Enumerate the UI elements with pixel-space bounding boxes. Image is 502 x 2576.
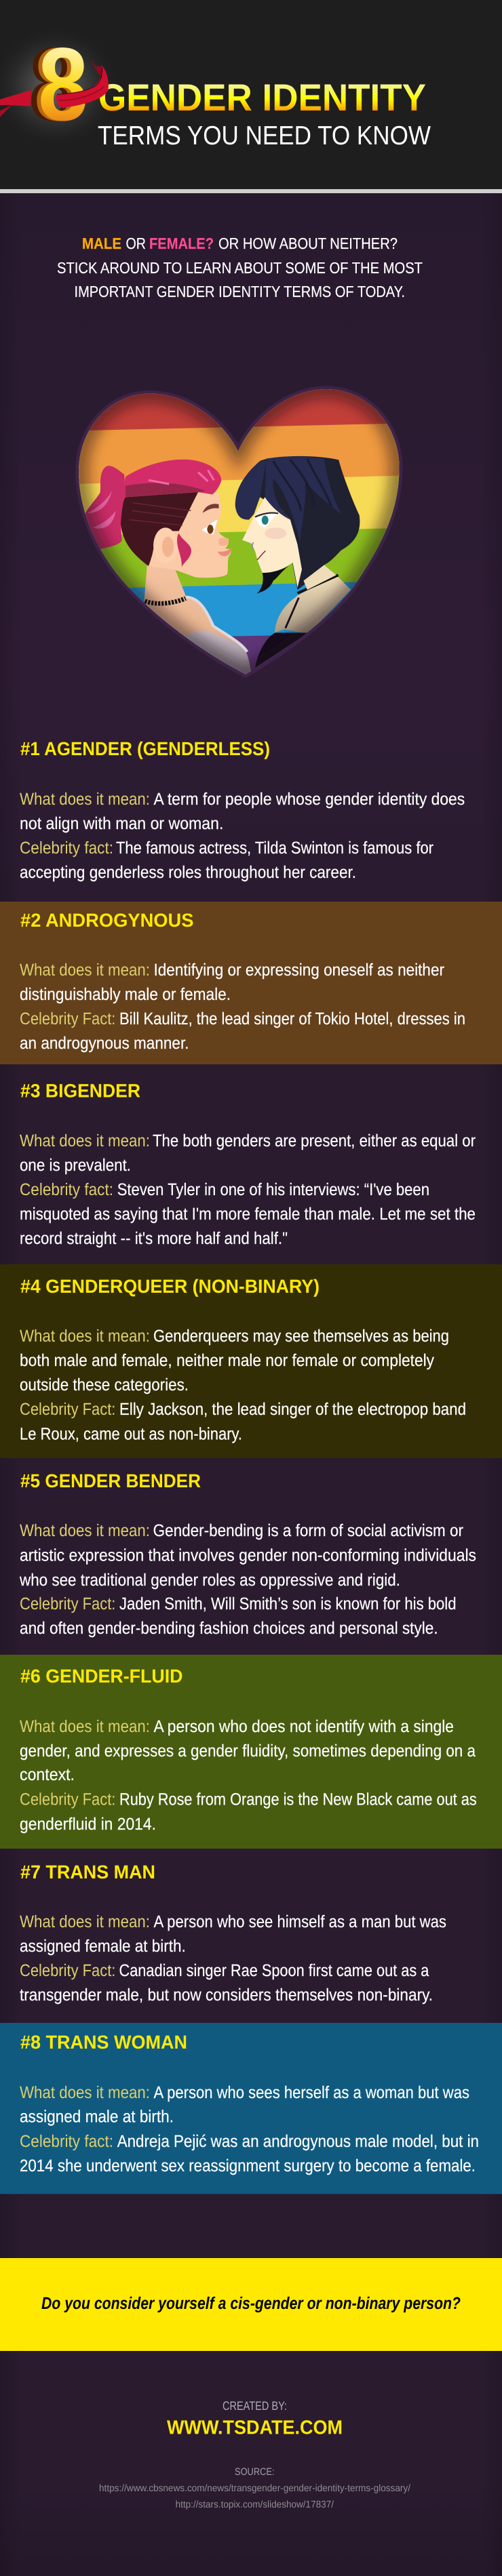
sources: http://stars.topix.com/slideshow/17837/ xyxy=(176,2499,334,2510)
icon: glow behind number xyxy=(0,24,122,149)
callout: question band xyxy=(0,2258,502,2351)
definition text: What does it mean: xyxy=(20,1912,150,1931)
sources: https://www.cbsnews.com/news/transgender-gender-identity-terms-glossary/ xyxy=(99,2483,411,2494)
panel: #2 androgynous xyxy=(0,902,502,1064)
definition text: outside these categories. xyxy=(20,1375,189,1394)
title: gender identity: GENDER IDENTITY xyxy=(98,76,426,119)
celebrity fact text xyxy=(20,839,433,882)
definition text: What does it mean: xyxy=(20,1521,150,1540)
intro text xyxy=(57,235,423,300)
celebrity fact text xyxy=(20,2132,479,2175)
definition text: not align with man or woman. xyxy=(20,814,223,833)
definition text: A person who does not identify with a single xyxy=(153,1717,454,1736)
definition text: A term for people whose gender identity does xyxy=(153,790,465,809)
celebrity fact text: Celebrity Fact: xyxy=(20,1790,115,1809)
definition text xyxy=(20,2083,469,2126)
celebrity fact text: record straight -- it's more half and half." xyxy=(20,1229,288,1248)
panel: #8 trans woman xyxy=(0,2023,502,2194)
definition text: What does it mean: xyxy=(20,790,150,809)
celebrity fact text: Steven Tyler in one of his interviews: “I've been xyxy=(117,1180,429,1199)
panel: #4 genderqueer xyxy=(0,1264,502,1458)
celebrity fact text xyxy=(20,1180,476,1248)
heading: #4: #4 GENDERQUEER (NON-BINARY) xyxy=(20,1276,320,1297)
definition text xyxy=(20,790,465,833)
icon: golden 8 with red ribbon xyxy=(0,26,109,142)
celebrity fact text: Celebrity fact: xyxy=(20,2132,113,2151)
definition text xyxy=(20,961,444,1004)
heading: #1: #1 AGENDER (GENDERLESS) xyxy=(20,738,270,759)
celebrity fact text: Celebrity Fact: xyxy=(20,1961,115,1980)
intro text: FEMALE? xyxy=(149,235,214,252)
header panel xyxy=(0,0,502,193)
panel: #1 agender xyxy=(0,719,502,902)
illustration: rainbow heart with two figures xyxy=(75,386,403,678)
heading: #6: #6 GENDER-FLUID xyxy=(20,1666,183,1687)
definition text: Genderqueers may see themselves as being xyxy=(153,1327,449,1346)
definition text: What does it mean: xyxy=(20,1717,150,1736)
celebrity fact text xyxy=(20,1594,456,1638)
heading: #7: #7 TRANS MAN xyxy=(20,1861,155,1883)
celebrity fact text: and often gender-bending fashion choices and personal style. xyxy=(20,1619,438,1638)
celebrity fact text: Canadian singer Rae Spoon first came out as a xyxy=(119,1961,429,1980)
heart inner shadow xyxy=(79,389,400,675)
created by label: CREATED BY: xyxy=(223,2399,287,2413)
celebrity fact text: transgender male, but now considers themselves non-binary. xyxy=(20,1986,433,2005)
definition text: both male and female, neither male nor female or completely xyxy=(20,1351,434,1370)
definition text xyxy=(20,1912,446,1956)
celebrity fact text: Jaden Smith, Will Smith’s son is known for his bold xyxy=(119,1594,456,1613)
celebrity fact text: Celebrity fact: xyxy=(20,839,113,858)
definition text: What does it mean: xyxy=(20,2083,150,2102)
definition text: A person who sees herself as a woman but was xyxy=(153,2083,469,2102)
definition text: Identifying or expressing oneself as neither xyxy=(153,961,444,980)
celebrity fact text: Celebrity Fact: xyxy=(20,1009,115,1028)
subtitle: terms you need to know: TERMS YOU NEED TO KNOW xyxy=(98,121,431,150)
rainbow stripes xyxy=(79,389,399,675)
panel: #3 bigender xyxy=(0,1064,502,1264)
intro text: OR HOW ABOUT NEITHER? xyxy=(218,235,398,252)
celebrity fact text: genderfluid in 2014. xyxy=(20,1815,156,1834)
celebrity fact text: Celebrity Fact: xyxy=(20,1400,115,1419)
definition text: What does it mean: xyxy=(20,1327,150,1346)
sources xyxy=(99,2466,411,2510)
definition text xyxy=(20,1131,476,1175)
heading: #2: #2 ANDROGYNOUS xyxy=(20,910,194,931)
definition text: assigned female at birth. xyxy=(20,1937,186,1956)
intro text: MALE xyxy=(82,235,121,252)
definition text: one is prevalent. xyxy=(20,1156,131,1175)
website: WWW.TSDATE.COM xyxy=(167,2417,343,2439)
celebrity fact text: accepting genderless roles throughout her career. xyxy=(20,863,356,882)
celebrity fact text: Le Roux, came out as non-binary. xyxy=(20,1425,242,1444)
intro text: IMPORTANT GENDER IDENTITY TERMS OF TODAY. xyxy=(75,283,405,300)
heading: #5: #5 GENDER BENDER xyxy=(20,1470,201,1491)
heading: #8: #8 TRANS WOMAN xyxy=(20,2032,187,2053)
definition text xyxy=(20,1327,449,1394)
definition text: distinguishably male or female. xyxy=(20,985,231,1004)
figure: dark-haired person xyxy=(235,456,360,668)
definition text: What does it mean: xyxy=(20,961,150,980)
panel: #7 trans man xyxy=(0,1849,502,2023)
celebrity fact text xyxy=(20,1790,477,1834)
celebrity fact text: The famous actress, Tilda Swinton is famous for xyxy=(116,839,433,858)
celebrity fact text: Bill Kaulitz, the lead singer of Tokio Hotel, dresses in xyxy=(119,1009,465,1028)
definition text: assigned male at birth. xyxy=(20,2107,174,2126)
definition text: context. xyxy=(20,1765,75,1784)
celebrity fact text: Celebrity Fact: xyxy=(20,1594,115,1613)
definition text: who see traditional gender roles as oppressive and rigid. xyxy=(19,1571,400,1590)
definition text: Gender-bending is a form of social activism or xyxy=(153,1521,463,1540)
celebrity fact text xyxy=(20,1961,433,2005)
credits xyxy=(167,2399,343,2439)
celebrity fact text: Celebrity fact: xyxy=(20,1180,113,1199)
celebrity fact text xyxy=(20,1400,466,1444)
panel: #6 gender-fluid xyxy=(0,1655,502,1849)
celebrity fact text xyxy=(20,1009,465,1053)
icon: golden 8 with red ribbon: 8 xyxy=(38,26,88,142)
definition text: What does it mean: xyxy=(20,1131,150,1150)
heading: #3: #3 BIGENDER xyxy=(20,1081,140,1101)
celebrity fact text: an androgynous manner. xyxy=(20,1034,189,1053)
intro text: STICK AROUND TO LEARN ABOUT SOME OF THE MOST xyxy=(57,259,423,277)
definition text: A person who see himself as a man but was xyxy=(153,1912,446,1931)
celebrity fact text: Elly Jackson, the lead singer of the electropop band xyxy=(119,1400,466,1419)
figure: pink-haired person xyxy=(85,460,252,675)
intro text: OR xyxy=(126,235,146,252)
definition text xyxy=(19,1521,476,1590)
definition text xyxy=(20,1717,476,1784)
sources: SOURCE: xyxy=(235,2466,274,2478)
panel: #5 gender bender xyxy=(0,1458,502,1655)
